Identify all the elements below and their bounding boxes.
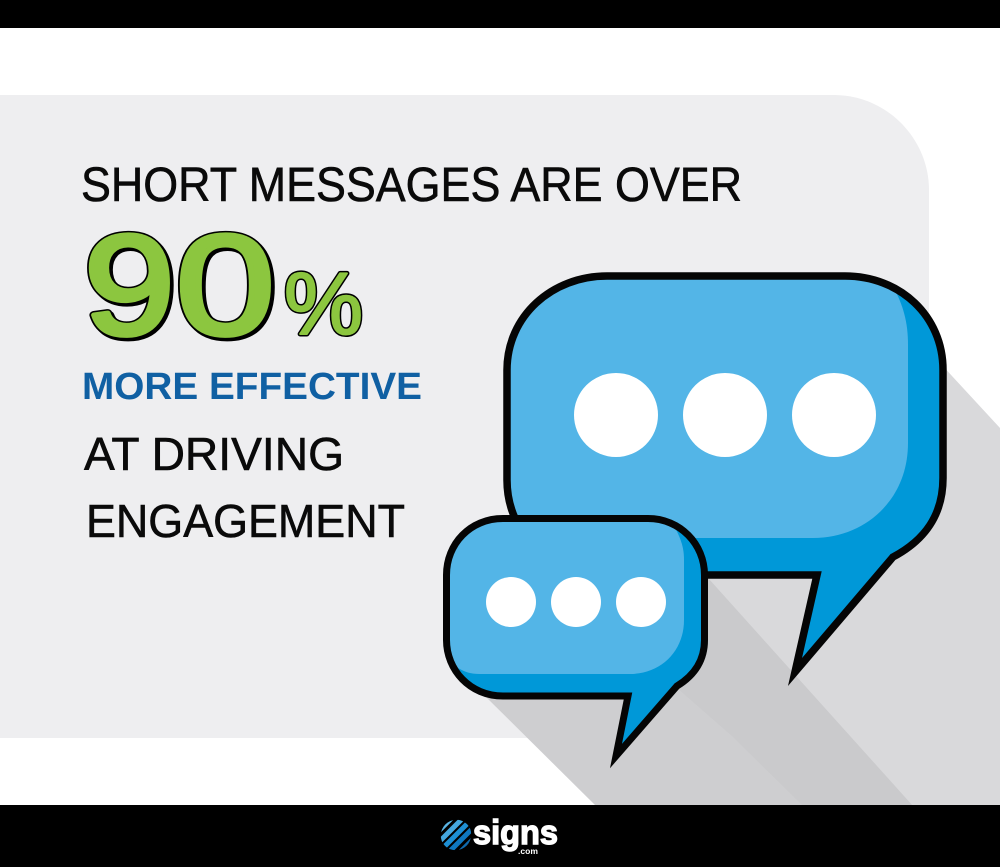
percent sign: % <box>284 254 363 353</box>
logo wordmark: signs <box>473 814 558 852</box>
digit 0: 0 <box>176 206 275 365</box>
body text: at driving engagement: ENGAGEMENT <box>86 495 405 547</box>
body text: at driving engagement <box>84 428 405 547</box>
logo icon: striped circle <box>440 820 472 850</box>
digit 0: 0 <box>176 206 275 365</box>
digit 9: 9 <box>84 206 175 365</box>
digit 9: 9 <box>84 206 175 365</box>
icon: small speech bubble <box>440 510 710 770</box>
body text: at driving engagement: AT DRIVING <box>84 428 344 480</box>
footer black bar <box>0 805 1000 867</box>
signs.com logo <box>440 818 558 854</box>
top black bar <box>0 0 1000 28</box>
subhead: more effective: MORE EFFECTIVE <box>82 366 422 408</box>
logo .com: .com <box>518 847 538 856</box>
headline text: SHORT MESSAGES ARE OVER <box>81 159 742 212</box>
digit 9: 9 <box>86 208 177 367</box>
percent sign: % <box>284 254 363 353</box>
icon: large speech bubble <box>490 260 960 690</box>
big statistic: 90% <box>84 206 363 367</box>
grey background panel <box>0 95 929 738</box>
digit 0: 0 <box>178 208 277 367</box>
long shadows <box>486 363 1000 805</box>
